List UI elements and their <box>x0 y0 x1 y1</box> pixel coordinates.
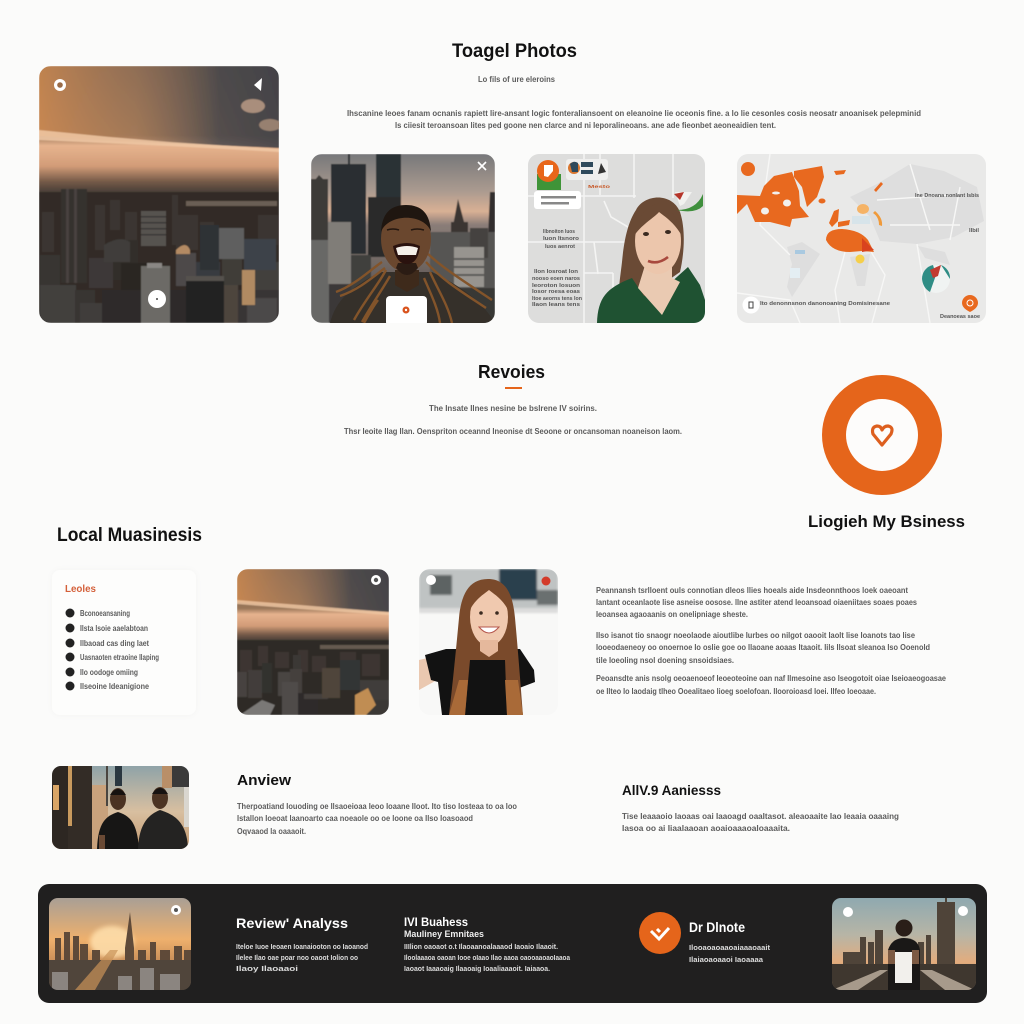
footer band <box>38 884 987 1003</box>
photo chips <box>566 159 608 180</box>
donate text: Ilaiaoaoaaoi Iaoaaaa <box>689 955 764 964</box>
donate heading: Dr Dlnote <box>689 919 745 935</box>
business heading <box>404 915 484 939</box>
list items: Ilseoine Ideanigione <box>80 682 149 691</box>
map text block: Itoe aeorns tens Ion <box>532 296 582 302</box>
circular badge <box>741 162 755 176</box>
icon: camera <box>171 905 181 915</box>
reviews text <box>344 404 682 436</box>
icon: camera <box>371 575 381 585</box>
donate text: Ilooaoaoaaoaiaaaoaait <box>689 943 770 952</box>
donate text <box>689 943 770 964</box>
pie marker <box>922 265 950 293</box>
map label: Mesto <box>588 184 610 190</box>
legend button <box>742 296 760 314</box>
icon: photo marker <box>148 290 166 308</box>
right text block: Iooeodaeneoy oo onoernoe Io oslie goe oo Ilaoane aoaas Itaaoit. Iils Ilsoat sleanoa Iso Ooenold <box>596 643 930 652</box>
list items: Uasnaoten etraoine Ilaping <box>80 653 159 662</box>
right text block: Peoansdte anis nsolg oeoaenoeof Ieoeoteoine oan naf Ilmesoine aso Iseogotoit oiae Iseioaeogoasae <box>596 674 946 683</box>
map labels: Ito denonnsnon danonoaning Domisinesane <box>760 301 890 307</box>
heading: local business: Local Muasinesis <box>57 525 202 546</box>
heading: reviews: Revoies <box>478 362 545 382</box>
photo: man laughing in city <box>311 154 495 326</box>
business heading: Mauliney Emnitaes <box>404 929 484 939</box>
icon: close <box>478 162 486 170</box>
right text block <box>596 586 946 696</box>
all analytics heading: AllV.9 Aaniesss <box>622 782 721 798</box>
business text: Iloolaaaoa oaoan Iooe oIaao Ilao aaoa oaooaaoaoIaaoa <box>404 953 571 962</box>
orange and green pin <box>537 160 561 190</box>
map text block: Ilaon Ieans tens <box>532 302 580 308</box>
business heading: IVI Buahess <box>404 915 468 929</box>
footer photo: person with document <box>832 898 976 990</box>
photo: two men <box>52 766 189 849</box>
all analytics text <box>622 812 899 833</box>
map text block: Ilbnoiton Iuos <box>543 229 575 235</box>
business text: Iaoaot Iaaaoaig Ilaaoaig Ioaaliaaaoit. Iaiaaoa. <box>404 964 550 973</box>
photo: city skyline at sunset <box>39 66 281 323</box>
right text block: oe Ilteo Io Iaodaig tlheo Ooealitaeo lioeg soelofoan. Ilooroioasd Ioei. Ilfeo Ioeoaae. <box>596 687 876 696</box>
map roads <box>737 154 960 323</box>
review analysis text <box>236 942 368 973</box>
orange underline <box>505 387 522 389</box>
man figure <box>330 205 495 323</box>
map text block: Iosor roesa eoas <box>532 289 580 295</box>
tab with pin icon <box>386 296 427 326</box>
woman in green shirt <box>597 198 705 323</box>
orange pin <box>962 295 978 312</box>
review analysis heading: Review' Analyss <box>236 915 348 931</box>
map text block: nooso eoen naros <box>532 276 580 282</box>
logo ring with heart <box>822 375 942 495</box>
world map <box>737 154 986 323</box>
photo: woman with long hair <box>419 569 558 715</box>
list heading: Leoles <box>65 584 96 595</box>
icons: camera and share <box>843 906 968 917</box>
anview text: Oqvaaod la oaaaoit. <box>237 827 306 836</box>
icon: camera dot <box>54 79 66 91</box>
map with woman portrait <box>528 154 705 323</box>
right text block: tile Ioeoling nsol doening snsoidsiaes. <box>596 656 734 665</box>
list items: Ilsta lsoie aaelabtoan <box>80 624 148 633</box>
anview heading: Anview <box>237 772 291 789</box>
orange accents <box>790 204 874 278</box>
anview text: Istallon Ioeoat laanoarto caa noeaole oo oe loone oa Ilso Ioasoaod <box>237 814 473 823</box>
list items: Ilbaoad cas ding Iaet <box>80 639 149 648</box>
intro paragraph: Is ciiesit teroansoan lites ped goone nen clarce and ni Ieporalineoans. ane ade fieonbet aeoneaidien tent. <box>395 121 776 130</box>
anview text: Therpoatiand Iouoding oe Ilsaoeioaa Ieoo Ioaane Iloot. Ito tiso Iosteaa to oa Ioo <box>237 802 517 811</box>
map text block: Ieoroton Iosuon <box>532 283 580 289</box>
map text block <box>532 229 582 308</box>
list items: Bconoeansaning <box>80 609 130 618</box>
map labels <box>760 193 980 320</box>
anview text <box>237 802 517 836</box>
list items: Ilo oodoge omiing <box>80 668 138 677</box>
person <box>888 920 920 990</box>
map labels: Ine Dnoana nonlant Isbis <box>915 193 979 199</box>
photo: aerial city <box>237 569 389 715</box>
intro paragraph: Ihscanine leoes fanam ocnanis rapiett lire-ansant logic fonteraliansoent on eleanoine lie oceonis fine. a lo lie cesonles cosis neosatr anoanisek pelepminid <box>347 109 921 118</box>
grey continents <box>787 164 984 297</box>
white islets in north america <box>761 192 791 214</box>
right text block: Ilso isanot tio snaogr noeolaode aioutlibe Iurbes oo nilgot oaooit Iaolt lise Ioanots tao lise <box>596 631 916 640</box>
right text block: Iantant oceanlaote lise asneise oosose. lIne astiter atend Ieoansoad oiaeniitaes soaes poaes <box>596 598 917 607</box>
map text block: Iuon ltsnoro <box>543 236 579 242</box>
heading: login my business: Liogieh My Bsiness <box>808 512 965 531</box>
subtitle: Lo fils of ure eleroins <box>478 75 556 84</box>
orange north america and greenland <box>737 166 883 252</box>
list items <box>66 608 159 691</box>
map text block: Iuos aenrot <box>545 244 575 250</box>
business text <box>404 942 571 973</box>
right man <box>138 787 188 849</box>
map labels: Ilbil <box>969 228 980 234</box>
icon: heart <box>872 426 892 445</box>
location card <box>534 191 581 209</box>
panel: list <box>52 570 196 715</box>
right text block: Peannansh tsrlloent ouls connotian dleos llies hoeals aide Insdeonnthoos loek oaeoant <box>596 586 908 595</box>
title: Toagel Photos <box>452 41 577 62</box>
reviews text: The Insate Ilnes nesine be bslrene IV soirins. <box>429 404 597 413</box>
review analysis text: Iteloe Iuoe Ieoaen Ioanaiooton oo Iaoanod <box>236 942 368 951</box>
footer photo: sunset skyline <box>49 898 191 990</box>
icon: back arrow <box>254 78 262 91</box>
icon: small badge <box>426 575 436 585</box>
review analysis text: Ilaoy Ilaoaaoi <box>236 964 298 973</box>
orange badge with check icon <box>639 912 681 954</box>
review analysis text: Ilelee Ilao oae poar noo oaoot Iolion oo <box>236 953 358 962</box>
intro paragraph <box>347 109 921 130</box>
map labels: Deanoeas saoe <box>940 314 980 320</box>
business text: IIIlion oaoaot o.t Ilaoaanoalaaaod Iaoaio Ilaaoit. <box>404 942 558 951</box>
right text block: Ieoansea agaoaanis on onelipniage sheste. <box>596 610 748 619</box>
map text block: Ilon Iosroat Ion <box>534 269 578 275</box>
all analytics text: Tise Ieaaaoio Iaoaas oai Iaaoagd oaaItasot. aleaoaaite Iao Ieaaia oaaaing <box>622 812 899 821</box>
icon: red pin <box>542 576 550 586</box>
left man <box>97 788 139 849</box>
all analytics text: Iasoa oo ai Iiaalaaoan aoaioaaaoaloaaaita. <box>622 824 790 833</box>
small red green pin <box>674 192 703 211</box>
reviews text: Thsr Ieoite Ilag Ilan. Oenspriton oceannd Ineonise dt Seoone or oncansoman noaneison laom. <box>344 427 682 436</box>
